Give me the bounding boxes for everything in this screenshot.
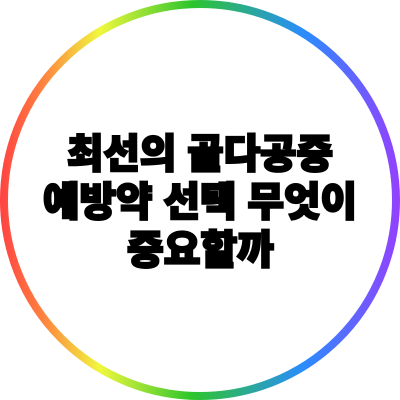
title line 1: 최선의 골다공증 — [67, 132, 333, 176]
title line 3: 중요할까 — [127, 228, 274, 272]
title line 2: 예방약 선택 무엇이 — [43, 180, 357, 224]
title — [43, 132, 357, 272]
